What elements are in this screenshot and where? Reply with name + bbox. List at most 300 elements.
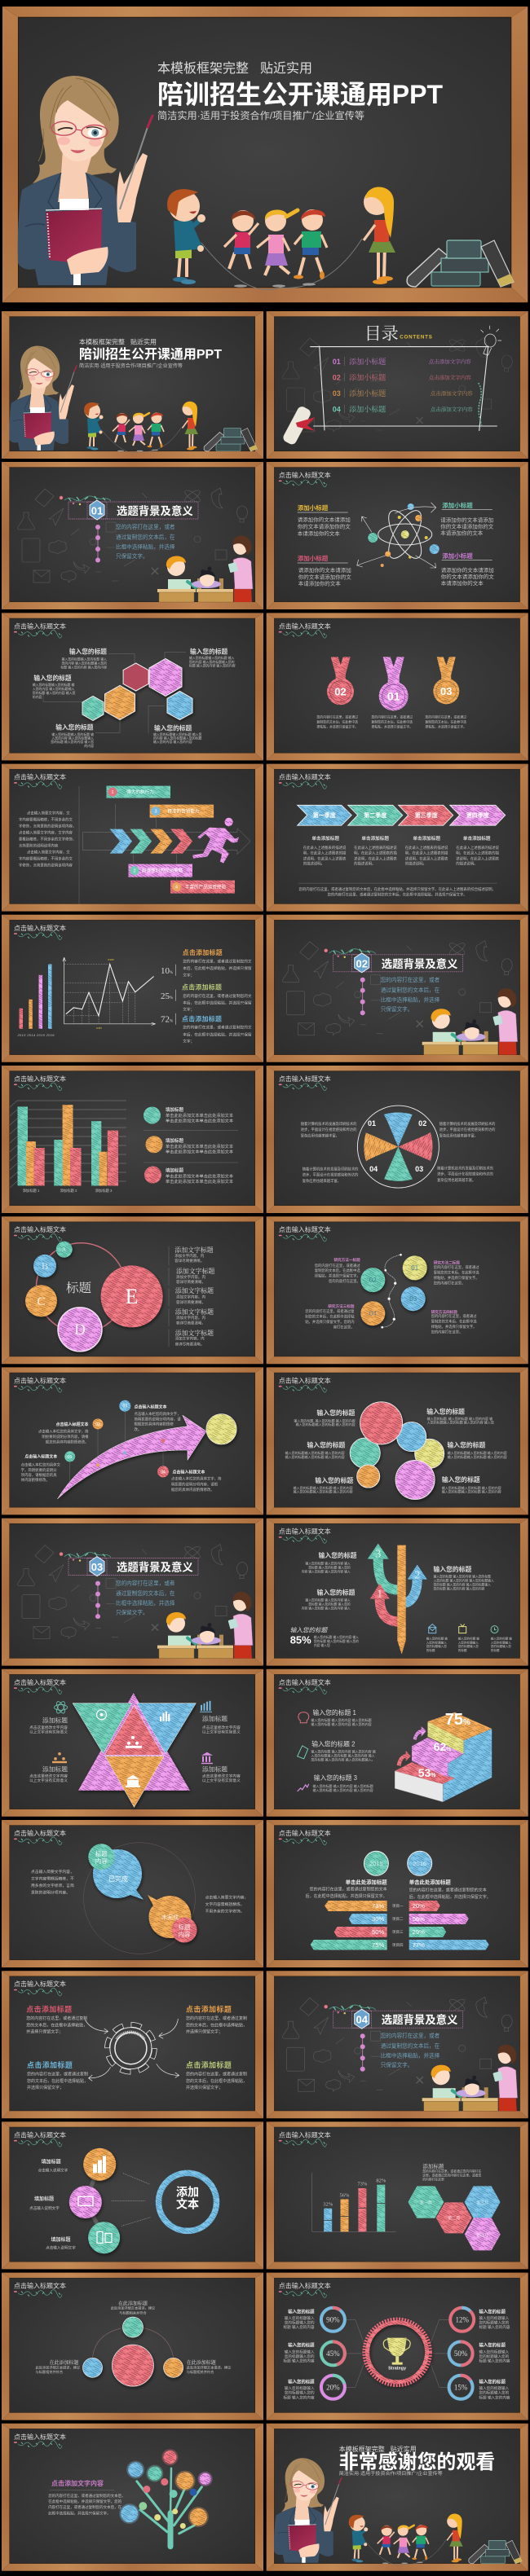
right labels: 您的标题输入您的 <box>479 2320 510 2326</box>
slide: tree <box>2 2424 263 2571</box>
label: left: 您的标题 输入您的内容 输入您 <box>33 691 76 695</box>
body text: 字修饰，言简意赅的说明该项内容。 <box>19 824 76 829</box>
slide title: 点击输入标题文本 <box>279 471 331 479</box>
label 2: 您标题 输入您的标题 输入您的 <box>308 1602 351 1607</box>
icon: runner <box>192 818 239 864</box>
body text: 字内容要概括精炼，不用多余的文 <box>19 817 73 823</box>
label 2 <box>298 1740 376 1761</box>
step 02 text: 明扼要的说明分项内容，请根 <box>42 1434 89 1440</box>
column text: 在此录入上述图表的描述说 <box>354 845 397 851</box>
slide: contents <box>267 311 528 459</box>
slide title: 点击输入标题文本 <box>14 1376 66 1384</box>
hero eyebrow: 本模板框架完整 <box>157 62 249 76</box>
cover text <box>79 337 222 369</box>
year text: 2015 <box>369 1860 383 1867</box>
hero eyebrow: 贴近实用 <box>260 61 312 76</box>
label: method 2 <box>434 1259 479 1286</box>
right text <box>409 1879 491 1900</box>
text: top left: 复杂应用也越来越丰富。 <box>301 1132 339 1139</box>
note: 您的内容打在这里。或者通过您的内容打在 <box>422 2169 482 2173</box>
left values: 30% <box>372 1915 384 1923</box>
block: bottom right: 您的文本后，在此框中选择粘贴， <box>186 2078 247 2084</box>
right labels: 您的标题输入您的 <box>479 2354 510 2359</box>
thank you text <box>339 2445 495 2477</box>
contents heading <box>364 324 433 344</box>
illustration: teacher and children <box>9 345 257 453</box>
bubble: not completed <box>148 1895 197 1942</box>
contents list: 添加小标题 <box>349 357 386 366</box>
label: method 1 <box>315 1257 360 1284</box>
section text: 比框中选择粘贴，并选择 <box>381 996 440 1003</box>
label: top left <box>60 647 107 669</box>
right labels: 标题 输入您的内容 <box>479 2358 510 2363</box>
circle diagram: A <box>62 1246 66 1253</box>
left values: 50% <box>372 1928 384 1936</box>
label 3: 输入您的标题 输入您的内容 输入您的标题 <box>313 1783 373 1788</box>
slide title: 点击输入标题文本 <box>14 924 66 932</box>
legend 2: 填加标题 <box>166 1137 184 1144</box>
label: bottom left <box>29 1752 68 1783</box>
notes: 本后，在此框中选择粘贴，并选择只保留 <box>183 1000 252 1005</box>
medal captions: 复制您的文本后，在此框中选 <box>425 719 466 723</box>
left labels: 输入您的标题, 输入您的标题 输入您的内容 <box>294 1418 356 1422</box>
label: method 2: 您的内容打在这里，或者通过 <box>434 1264 479 1270</box>
icon: curved arrows <box>397 1726 426 1766</box>
legend 2: 单击此处添加文本单击此处添加文本 <box>166 1143 233 1150</box>
ring with label <box>158 2173 217 2231</box>
contents list: 点击添加文字内容 <box>431 406 473 412</box>
label: top right: 您的内容 输入您的标题输入您的 <box>189 660 235 664</box>
icon captions: 输入您的标题 输 <box>426 1637 448 1641</box>
list items: 添加文字内容。内 <box>175 1336 205 1342</box>
label: method 4: 择粘贴，并选择只保留文字。 <box>431 1324 477 1330</box>
label 3: 输入您的标题 <box>434 1565 471 1573</box>
list items: 添加文字内容。内 <box>176 1274 205 1280</box>
petal circle diagram <box>357 1106 439 1188</box>
slide title: 点击输入标题文本 <box>279 622 331 630</box>
label 1: 输入您的标题 1 <box>313 1708 356 1717</box>
slide: growth arrow <box>2 1367 263 1514</box>
bar chart: 2013 2014 2015 2016 <box>16 1033 55 1037</box>
left labels: 输入您的标题输入 <box>285 2315 315 2321</box>
label: left: 入您的内容 输入您的标题输入 <box>33 687 74 691</box>
icon: trophy <box>383 2338 410 2365</box>
node labels: 填加标题 <box>42 2158 61 2165</box>
column titles: 单击添加标题 <box>361 835 389 842</box>
circle diagram: B <box>42 1260 48 1272</box>
text left: 用多余的文字修饰，言简 <box>31 1883 74 1888</box>
statistic 85%: 输入您的标题 输入您的内容 输入 <box>314 1635 359 1639</box>
step 01 text: 字，简明扼要的说明分 <box>21 1467 57 1473</box>
label: top left <box>29 1700 68 1734</box>
step markers: 04 <box>161 1470 166 1475</box>
label: bottom left <box>51 723 94 748</box>
left text: 后，在此框中选择粘贴，并选择只保留文字。 <box>306 1893 387 1899</box>
label: method 3: 容打在这里。 <box>333 1325 355 1330</box>
text right: 文字内容需概括精炼， <box>205 1901 245 1907</box>
ring 12% <box>450 2308 474 2332</box>
left labels: 标题 输入您的内容 <box>284 2324 315 2330</box>
chalk frame <box>311 346 497 430</box>
medal captions <box>316 714 466 728</box>
banner 2 <box>129 864 192 877</box>
icon captions: 输入您的标题 输 <box>491 1637 512 1641</box>
label: bottom left: 点击这里修改文字内容 <box>29 1773 68 1778</box>
block: bottom left: 本请添加你的文本 <box>298 580 341 587</box>
left labels: 输入您的标题输入您的标题 输入您的内容 <box>285 1450 345 1455</box>
column titles: 单击添加标题 <box>463 835 491 842</box>
section text: 比框中选择粘贴，并选择 <box>116 543 175 551</box>
stair values <box>418 1711 470 1779</box>
column text: 述说明，在此录入上述图表 <box>354 856 397 862</box>
left labels <box>284 2308 315 2401</box>
list items <box>174 1246 214 1347</box>
slide: hexagons <box>2 613 263 760</box>
slide: four petal circle <box>267 1066 528 1213</box>
block: bottom right: 点击添加标题 <box>186 2060 232 2069</box>
label: bottom right: 以上文字没有实际意义 <box>202 1778 241 1783</box>
ring 50% <box>449 2341 473 2365</box>
label: top <box>111 2300 156 2316</box>
label 1 <box>302 1551 357 1574</box>
slide title: 点击输入标题文本 <box>14 1980 66 1988</box>
label: top left: 添加标题 <box>42 1716 68 1724</box>
label: method 4: 复制您的文本后，在此框中选 <box>431 1319 477 1325</box>
target circle <box>206 1414 236 1444</box>
contents list: 02 <box>333 373 341 381</box>
hexagon group: 第三月 <box>476 2200 488 2205</box>
section number: 03 <box>91 1561 103 1573</box>
legend 3 <box>144 1167 233 1185</box>
contents list: 04 <box>333 406 341 414</box>
percentages: 72% <box>161 1014 173 1024</box>
slide: line and bar chart <box>2 915 263 1062</box>
ring 15% <box>449 2376 473 2399</box>
step 03 text: 根据您的具体内容酌情修 <box>134 1421 174 1426</box>
circle cluster <box>350 1402 444 1499</box>
list items: 添加文字标题 <box>176 1267 214 1275</box>
section text: 通过复制您的文本后，在 <box>381 2042 440 2050</box>
block: top right <box>440 501 494 536</box>
block: top right: 您的内容打在这里，或者通过复制 <box>186 2016 247 2021</box>
left labels: 标题 输入您的内容 <box>284 2358 315 2363</box>
banner 2: 2 <box>133 869 136 874</box>
node labels: 点击输入说明文字 <box>46 2244 76 2250</box>
label: top: 在此添加标题 <box>118 2300 148 2306</box>
section art <box>18 1545 253 1659</box>
left labels: 输入您的标题 <box>288 2341 315 2348</box>
banner 4: 丰富的产品运营经验 <box>185 884 227 890</box>
column text: 述说明，在此录入上述图表 <box>456 856 500 862</box>
bubble text: 标题 <box>95 1849 108 1857</box>
banner 1: 强大的执行力 <box>126 789 154 795</box>
column text: 述说明，在此录入上述图表 <box>405 856 448 862</box>
label 2 <box>302 1589 356 1611</box>
tree heading: 点击添加文字内容 <box>51 2479 104 2487</box>
line chart <box>63 957 156 1030</box>
arrow labels <box>313 811 489 819</box>
big arrow <box>57 1415 206 1499</box>
label 1: 输入您的标题 <box>319 1551 357 1559</box>
bubble text: 已完成 <box>108 1875 128 1883</box>
icon captions: 的标题 <box>426 1648 435 1652</box>
left labels: 标题 输入您的内容 <box>284 2395 315 2401</box>
notes: 点击添加标题 <box>182 982 222 991</box>
step markers: 03 <box>123 1404 127 1409</box>
icon captions: 输入您的标题 输 <box>458 1637 479 1641</box>
arrow process <box>298 805 506 825</box>
step markers <box>64 1400 169 1477</box>
block: bottom right: 您的内容打在这里，或者通过复制 <box>186 2072 247 2077</box>
year text <box>369 1860 426 1867</box>
label 1: 您标题 输入您的标题 输入您的 <box>308 1566 351 1570</box>
bar chart <box>312 2173 396 2231</box>
label: method 1: 复制您的文本后，在此框中选 <box>315 1268 360 1273</box>
step 02 text: 据您的具体内容酌情修改。 <box>46 1439 88 1444</box>
label: bottom right: 的内容 输入您的标题输入您的标题 <box>153 736 202 740</box>
list items: 添加文字标题 <box>175 1308 214 1316</box>
slide: chevrons and runner <box>2 764 263 912</box>
slide: six circles <box>267 1367 528 1514</box>
slide title: 点击输入标题文本 <box>279 1075 331 1083</box>
label 1: 内容 输入您标题 输入您的内容 输入 <box>302 1570 351 1574</box>
column titles <box>311 835 491 842</box>
block: top left <box>26 2004 87 2035</box>
slide title: 点击输入标题文本 <box>279 1376 331 1384</box>
label: left: 在此添加标题 <box>49 2359 78 2366</box>
label: bottom right <box>201 1752 241 1783</box>
left labels: 输入您的标题 <box>288 2379 315 2385</box>
ring 45% <box>321 2341 345 2365</box>
label: left <box>33 674 76 699</box>
column text: 的描述说明。 <box>456 861 478 867</box>
right labels: 输入您的标题输入您的标题 输入您的内容 <box>448 1454 507 1459</box>
percentages: 10% <box>161 966 173 976</box>
petal circle diagram: 02 <box>418 1119 426 1128</box>
label: left: 的内容 <box>33 695 42 699</box>
step 03 text: 点击输入本栏您的具体文字， <box>134 1411 181 1417</box>
thank you text: 非常感谢您的观看 <box>339 2451 495 2473</box>
label: bottom left: 您的标题 输入您的内容 输入您 <box>51 740 94 744</box>
section heading: 选题背景及意义 <box>382 957 458 970</box>
icon: light bulb <box>481 326 501 355</box>
notes: 您的内容打在这里，或者通过复制您的文 <box>183 993 252 999</box>
block: top right: 并选择只保留文字； <box>186 2029 223 2035</box>
list items: 添加文字内容。内 <box>176 1315 205 1321</box>
banner 3: 精准的营销能力 <box>167 808 200 815</box>
step 02 text: 点击输入本栏您的具体文字，简 <box>38 1428 89 1434</box>
ring with label: 文本 <box>176 2197 199 2210</box>
hexagon group: 第一月 <box>420 2200 432 2205</box>
label: left <box>36 2359 81 2375</box>
hexagon group <box>408 2186 501 2250</box>
line chart: max <box>108 957 115 961</box>
bubble text: 内容 <box>95 1857 108 1865</box>
note: 添加标题 <box>422 2162 444 2169</box>
medal captions: 择粘贴，并选择只保留文字。 <box>425 724 466 728</box>
body text: 字内容要概括精炼，不用多余的文 <box>19 856 73 862</box>
tree text: 此框中选择粘贴，并选择只保留文字。 <box>48 2510 111 2516</box>
circle diagram: 标题 <box>66 1281 91 1295</box>
cover text: 简洁实用·适用于投资合作/项目推广/企业宣传等 <box>79 363 183 369</box>
section text: 通过复制您的文本后，在 <box>116 1589 175 1597</box>
label: top right: 输入您的标题 <box>190 647 227 655</box>
slide title: 点击输入标题文本 <box>14 1678 66 1686</box>
text left: 意赅的说明分项内容。 <box>31 1890 70 1895</box>
slide: bars and hexagons <box>267 2121 528 2269</box>
bubble text: 内容 <box>178 1930 191 1938</box>
left labels: 输入您的标题 <box>315 1476 353 1484</box>
column text: 的描述说明。 <box>405 861 426 867</box>
slide: butterfly bars <box>267 1820 528 1967</box>
icon: envelope <box>429 1624 436 1633</box>
summary text: 您的内容打在这里，或者通过复制您的文本后，在此框中选择粘贴，并选择只保留文字。 <box>328 892 467 898</box>
block: bottom left <box>27 2060 88 2090</box>
contents list: 添加小标题 <box>349 404 386 414</box>
block: bottom left <box>298 554 351 587</box>
curved arrows <box>85 2019 179 2081</box>
node icons <box>78 2156 112 2243</box>
right labels: 输入您的标题输入 <box>479 2315 510 2321</box>
left values: 73% <box>372 1902 384 1910</box>
bar chart: 32% <box>323 2201 333 2207</box>
right labels: 输入您的标题输入您的标题 输入您的内容 <box>442 1488 501 1493</box>
right text: 单击此处添加标题 <box>409 1879 451 1885</box>
right labels <box>479 2308 510 2401</box>
stair values: 62% <box>434 1740 452 1753</box>
left labels: 输入您的标题 <box>317 1409 356 1417</box>
statistic 85%: 85% <box>290 1634 311 1646</box>
right labels: 输入您的标题输入 <box>479 2349 510 2354</box>
notes: 您的内容打在这里，或者通过复制您的文 <box>183 958 252 964</box>
list items: 容详尽简要清晰。 <box>176 1299 205 1305</box>
petal circle diagram: 04 <box>369 1165 378 1173</box>
trophy gear <box>364 2319 431 2385</box>
slide: circles and ring <box>2 2121 263 2269</box>
contents heading: CONTENTS <box>400 334 433 341</box>
list items: 容详尽简要清晰。 <box>176 1279 205 1285</box>
text: top right: 进步，平面设计在视觉感染和传达的 <box>439 1127 495 1132</box>
text: bottom left: 复杂应用也越来越丰富。 <box>303 1178 341 1184</box>
list items: 容详尽简要清晰。 <box>176 1321 205 1326</box>
icon captions: 入您的标题输入 <box>458 1641 479 1645</box>
row labels <box>392 1904 404 1948</box>
right labels: 输入您的标题 <box>479 2308 506 2314</box>
block: bottom left: 您的文本后，在此框中选择粘贴， <box>27 2078 88 2084</box>
step 02 text <box>38 1422 89 1444</box>
bar chart <box>16 965 55 1037</box>
block: bottom left: 并选择只保留文字； <box>27 2085 64 2090</box>
staircase <box>395 1712 492 1802</box>
label 2: 输入您的标题 2 <box>311 1740 355 1748</box>
right labels: 输入您的标题 <box>479 2379 506 2385</box>
block: top right: 添加小标题 <box>442 501 473 509</box>
right values <box>413 1902 425 1949</box>
icon captions: 入您的标题输入 <box>426 1641 447 1645</box>
label 3: 输入您的标题 3 <box>314 1774 357 1782</box>
contents list: 点击添加文字内容 <box>431 389 473 397</box>
slide: S curve circles <box>267 1216 528 1364</box>
node labels: 点击输入说明文字 <box>38 2167 68 2173</box>
list items: 添加文字内容。内 <box>176 1295 205 1300</box>
column titles: 单击添加标题 <box>413 835 440 842</box>
contents list: 点击添加文字内容 <box>429 373 471 381</box>
block: top left: 您的文本后，在此框中选择粘贴， <box>26 2023 87 2029</box>
label: method 2: 研究方法二标题 <box>434 1259 460 1265</box>
step 03 text <box>134 1404 181 1432</box>
label: top right: 输入您的标题输入您的标题 输入 <box>189 656 235 660</box>
column text: 明，在此录入上述图表的描 <box>303 851 347 856</box>
stair values: 75% <box>445 1711 470 1729</box>
label 1: 输入您的标题 输入您的内容 输入 <box>305 1562 351 1566</box>
label: top right: 标题 输入您的内容 输入您的内容 <box>189 663 236 667</box>
left labels: 您的标题输入您的 <box>285 2320 315 2326</box>
block: bottom right: 本请添加你的文本 <box>441 579 484 587</box>
icon: clock <box>491 1626 498 1633</box>
branching arrows: 1 <box>377 1589 382 1601</box>
slide title: 点击输入标题文本 <box>14 1075 66 1083</box>
medal captions: 择粘贴，并选择只保留文字。 <box>371 724 413 728</box>
circles <box>83 2317 183 2386</box>
text right: 点击输入简要文字内容， <box>205 1895 248 1900</box>
stair values: 53% <box>418 1766 436 1779</box>
section heading: 选题背景及意义 <box>117 504 193 517</box>
section text: 通过复制您的文本后，在 <box>116 533 175 541</box>
right labels: 输入您的标题, 输入您的标题 输入您的内容 输 <box>427 1416 492 1421</box>
step 04 text: 明扼要的说明分项内容，请根 <box>171 1481 219 1487</box>
right labels: 输入您的标题输入 <box>479 2385 510 2391</box>
hero slide: cover <box>2 7 528 302</box>
connector lines <box>347 2319 449 2387</box>
text left: 文字内容需概括精炼，不 <box>31 1875 74 1882</box>
left labels: 您的标题输入您的 <box>285 2354 315 2359</box>
contents heading: 目录 <box>364 324 399 344</box>
slide: quarterly arrows <box>267 764 528 912</box>
section text: 比框中选择粘贴，并选择 <box>116 1599 175 1607</box>
gear icon <box>107 2024 154 2072</box>
node labels: 填加标题 <box>34 2196 54 2202</box>
ring 12%: 12% <box>455 2316 469 2324</box>
label 1: 输入您的标题 输入您的内容 输入您的标题 <box>311 1717 372 1722</box>
row labels: 项目二 <box>392 1917 404 1922</box>
left labels: 输入您的标题输入您的标题 输入您的内容 <box>294 1488 353 1493</box>
column text <box>303 845 500 867</box>
legend 3: 单击此处添加文本单击此处添加文本 <box>166 1173 233 1180</box>
text: bottom left: 随着计算机技术的发展及印刷技术的 <box>303 1167 358 1172</box>
ring 15%: 15% <box>454 2384 468 2392</box>
label 1 <box>298 1708 372 1726</box>
medal 02: 02 <box>334 685 347 697</box>
label 3: 入您的标题 输入您的内容 输入您的标题输入 <box>434 1579 494 1583</box>
left values <box>372 1902 384 1949</box>
step 01 text: 点击输入标题文本 <box>24 1454 57 1460</box>
circle numbers: 01 <box>411 1264 419 1272</box>
arrow labels: 第三季度 <box>415 811 438 819</box>
circle diagram <box>25 1242 163 1352</box>
section number: 02 <box>356 957 368 969</box>
banner 3 <box>150 805 214 818</box>
outline arrow <box>83 829 250 855</box>
label: top right <box>200 1701 241 1734</box>
section number: 04 <box>356 2014 369 2026</box>
block: bottom right: 请添加你的文本请添加 <box>441 566 494 574</box>
S curve <box>381 1254 402 1328</box>
tree illustration <box>119 2449 213 2547</box>
section art <box>282 941 518 1055</box>
column text: 的描述说明。 <box>354 861 375 867</box>
block: bottom left: 添加小标题 <box>298 554 329 562</box>
label: method 1: 您的内容打在这里，或者通过 <box>315 1263 360 1268</box>
